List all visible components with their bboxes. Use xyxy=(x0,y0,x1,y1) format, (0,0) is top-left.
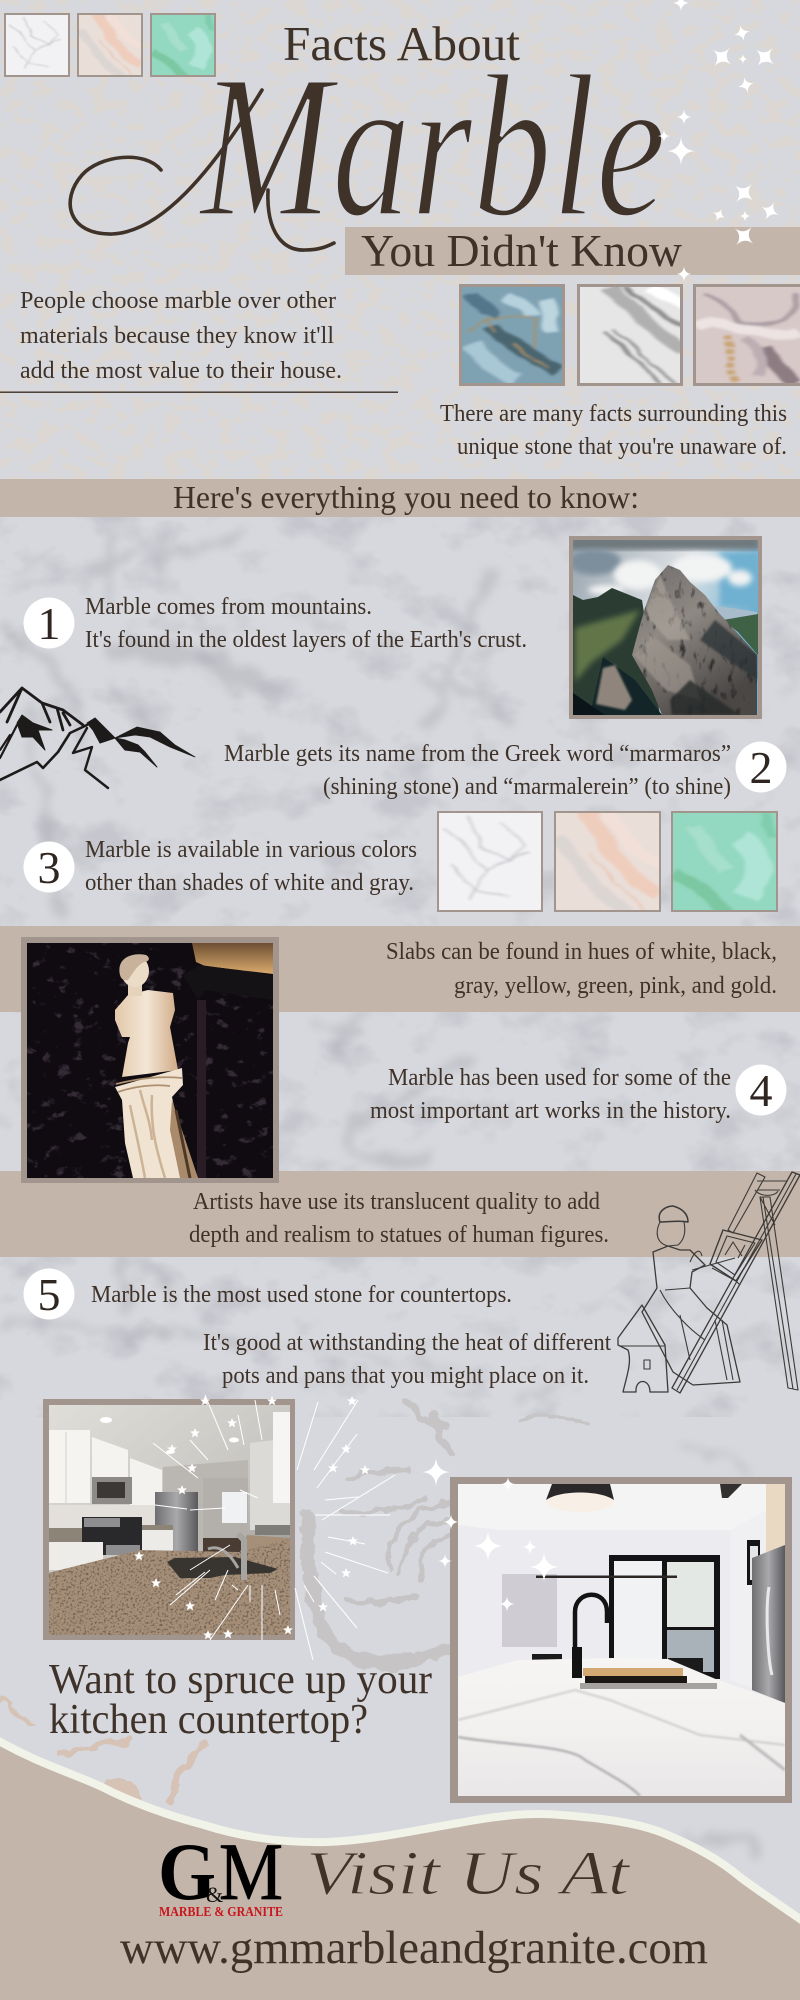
swatches for fact 3 xyxy=(437,810,778,913)
ornament: flourishes around the word Marble xyxy=(70,90,334,250)
icon: mountain outline xyxy=(0,688,195,788)
logo: GM Marble & Granite: G xyxy=(158,1826,216,1917)
band: slab colours: Slabs can be found in hues of white, black, xyxy=(386,939,777,965)
fact 2: 2 xyxy=(750,742,772,793)
text: artists: Artists have use its translucent quality to add xyxy=(193,1189,600,1215)
call to action text xyxy=(49,1657,432,1743)
heading band: You Didn't Know: You Didn't Know xyxy=(361,226,682,276)
fact 2: Marble gets its name from the Greek word “marmaros” xyxy=(224,741,731,767)
band: Here's everything: Here's everything you need to know: xyxy=(173,479,639,515)
text: intro right: unique stone that you're unaware of. xyxy=(457,434,787,460)
fact 5: pots and pans that you might place on it. xyxy=(222,1363,589,1389)
text: intro left: People choose marble over other xyxy=(20,288,336,314)
decorative swirl marble xyxy=(307,1400,590,1663)
fact 4: Marble has been used for some of the xyxy=(388,1065,731,1091)
fact 3 xyxy=(24,837,417,896)
fact 1: 1 xyxy=(38,598,60,649)
fact 5: 5 xyxy=(38,1269,60,1320)
fact 1: It's found in the oldest layers of the Earth's crust. xyxy=(85,627,527,653)
band: slab colours xyxy=(0,926,800,1012)
fact 1: Marble comes from mountains. xyxy=(85,594,372,620)
heading: Marble: Marble xyxy=(198,33,666,260)
illustration: painter at easel xyxy=(618,1172,800,1393)
text: intro right: There are many facts surrounding this xyxy=(440,401,787,427)
logo: GM Marble & Granite xyxy=(158,1826,283,1920)
footer wave xyxy=(0,1736,800,2000)
fact 4: 4 xyxy=(750,1065,772,1116)
background: marble veins xyxy=(0,525,800,1850)
fact 3: 3 xyxy=(38,842,60,893)
fact 3: other than shades of white and gray. xyxy=(85,870,414,896)
fact 2: (shining stone) and “marmalerein” (to shine) xyxy=(323,774,731,800)
text: intro right xyxy=(440,401,787,460)
heading band: You Didn't Know xyxy=(345,226,800,276)
large marble swatches xyxy=(459,284,800,386)
photo: granite kitchen xyxy=(43,1399,295,1640)
band: artists xyxy=(0,1171,800,1257)
logo: GM Marble & Granite: MARBLE & GRANITE xyxy=(159,1905,283,1920)
fact 3: Marble is available in various colors xyxy=(85,837,417,863)
fact 5 xyxy=(24,1268,611,1389)
text: website: www.gmmarbleandgranite.com xyxy=(120,1923,708,1974)
fact 2 xyxy=(224,741,786,800)
band: slab colours: gray, yellow, green, pink, and gold. xyxy=(454,973,777,999)
small marble swatches xyxy=(4,13,216,77)
sparkles and light rays over kitchen photos xyxy=(153,1395,395,1660)
decorative peach marble at lower left xyxy=(0,1700,205,1800)
fact 5: Marble is the most used stone for countertops. xyxy=(91,1282,512,1308)
fact 1 xyxy=(24,594,527,653)
text: artists xyxy=(189,1189,609,1248)
text: artists: depth and realism to statues of human figures. xyxy=(189,1222,609,1248)
text: Visit Us At: Visit Us At xyxy=(306,1840,631,1908)
fact 4: most important art works in the history. xyxy=(370,1098,731,1124)
heading: Facts About: Facts About xyxy=(283,16,520,71)
logo: GM Marble & Granite: & xyxy=(206,1882,223,1907)
photo: mountain xyxy=(569,536,762,719)
call to action text: Want to spruce up your xyxy=(49,1657,432,1703)
photo: marble island kitchen xyxy=(450,1477,792,1803)
fact 5: It's good at withstanding the heat of different xyxy=(203,1330,611,1356)
background: soft clouding xyxy=(0,517,800,1417)
sparkles: top right xyxy=(658,0,783,282)
logo: GM Marble & Granite: M xyxy=(219,1826,283,1917)
fact 4 xyxy=(370,1064,786,1124)
call to action text: kitchen countertop? xyxy=(49,1697,368,1743)
photo: statue xyxy=(21,937,279,1183)
text: intro left: add the most value to their house. xyxy=(20,358,342,384)
text: intro left xyxy=(20,288,342,384)
text: intro left: materials because they know it'll xyxy=(20,323,334,349)
background: beige speckled marble pattern xyxy=(0,0,800,479)
band: Here's everything xyxy=(0,479,800,517)
